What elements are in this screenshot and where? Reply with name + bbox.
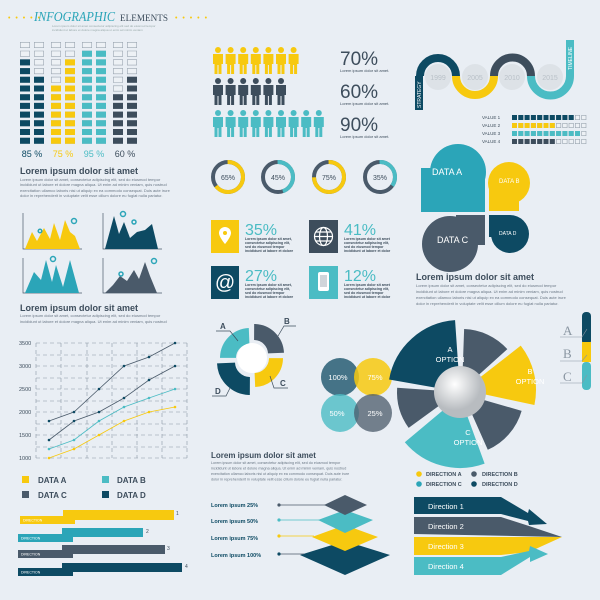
- timeline: 2010: [504, 75, 520, 82]
- heading middle: exercitation ullamco laboris nisi ut aliquip ex ea commodo consequat. Duis aute irure: [211, 472, 349, 476]
- bar grid labels: 75 %: [53, 149, 73, 159]
- icon stats: Lorem ipsum dolor sit amet,: [245, 237, 292, 241]
- ABCD ring chart: [212, 317, 296, 396]
- icon stats: 12%: [344, 268, 376, 285]
- timeline: STRATEGY: [417, 81, 423, 108]
- chart legend: DATA D: [117, 491, 146, 500]
- heading left 2: [20, 303, 167, 324]
- line chart: 2500: [19, 387, 31, 393]
- chart legend: DATA C: [38, 491, 67, 500]
- icon stats: consectetur adipiscing elit,: [245, 241, 290, 245]
- percentage stats 70/60/90: Lorem ipsum dolor sit amet.: [340, 134, 389, 139]
- timeline: TIMELINE: [568, 46, 574, 70]
- percentage stats 70/60/90: Lorem ipsum dolor sit amet.: [340, 68, 389, 73]
- icon stats: consectetur adipiscing elit,: [344, 287, 389, 291]
- data flower: DATA D: [499, 231, 517, 237]
- value bars: VALUE 3: [482, 131, 501, 136]
- direction arrows: Direction 1: [428, 502, 464, 511]
- donut gauges: 45%: [271, 175, 285, 182]
- option pie chart: OPTION: [454, 438, 482, 447]
- icon stats: consectetur adipiscing elit,: [344, 241, 389, 245]
- line chart: 3000: [19, 364, 31, 370]
- value bars: VALUE 2: [482, 123, 501, 128]
- heading right: incididunt ut labore et dolore magna aliqua. Ut enim ad minim veniam, quis nostrud: [416, 289, 563, 294]
- icon stats: sed do eiusmod tempor: [344, 291, 384, 295]
- bar grid labels: 95 %: [84, 149, 104, 159]
- heading left 1: dolor in reprehenderit in voluptate velit esse cillum dolore eu fugiat nulla pariatur.: [20, 193, 163, 198]
- option pie chart: OPTION: [516, 377, 544, 386]
- icon stats: sed do eiusmod tempor: [245, 245, 285, 249]
- direction bars: 4: [185, 564, 188, 570]
- value bars: VALUE 4: [482, 139, 501, 144]
- direction bars: [18, 510, 188, 576]
- donut gauges: [213, 162, 395, 192]
- ABCD ring chart: D: [215, 387, 221, 396]
- icon stats: 41%: [344, 222, 376, 239]
- venn circles: 75%: [367, 373, 383, 382]
- line chart: 1500: [19, 433, 31, 439]
- direction bars: DIRECTION: [23, 518, 43, 522]
- ABCD ring chart: C: [280, 379, 286, 388]
- percentage stats 70/60/90: 70%: [340, 49, 378, 70]
- direction arrows: Direction 4: [428, 562, 464, 571]
- heading middle: Lorem ipsum dolor sit amet: [211, 451, 316, 460]
- icon stats: sed do eiusmod tempor: [344, 245, 384, 249]
- heading middle: [211, 451, 349, 482]
- layered diamonds list: Lorem ipsum 50%: [211, 519, 258, 525]
- heading left 1: Lorem ipsum dolor sit amet: [20, 166, 138, 176]
- heading left 2: Lorem ipsum dolor sit amet: [20, 303, 138, 313]
- icon stats: @: [215, 272, 235, 294]
- heading left 2: Lorem ipsum dolor sit amet, consectetur adipiscing elit, sed do eiusmod tempor: [20, 313, 161, 318]
- direction legend: DIRECTION A: [426, 472, 462, 478]
- heading middle: Lorem ipsum dolor sit amet, consectetur adipiscing elit, sed do eiusmod tempor: [211, 461, 341, 465]
- people pictogram: [213, 47, 324, 137]
- bar grid labels: 60 %: [115, 149, 135, 159]
- icon stats: incididunt ut labore et dolore: [245, 249, 293, 253]
- icon stats: 27%: [245, 268, 277, 285]
- heading right: Lorem ipsum dolor sit amet: [416, 272, 534, 282]
- venn circles: 50%: [329, 409, 345, 418]
- icon stats: 35%: [245, 222, 277, 239]
- icon stats: consectetur adipiscing elit,: [245, 287, 290, 291]
- chart legend: DATA B: [117, 476, 146, 485]
- chart legend: [22, 476, 146, 500]
- chart legend: DATA A: [38, 476, 67, 485]
- direction arrows: [414, 497, 562, 575]
- title: incididunt ut labore et dolore magna aliqua ut enim ad minim veniam: [52, 28, 143, 32]
- bar grid labels: 85 %: [22, 149, 42, 159]
- donut gauges: 65%: [221, 175, 235, 182]
- percentage stats 70/60/90: Lorem ipsum dolor sit amet.: [340, 101, 389, 106]
- icon stats: Lorem ipsum dolor sit amet,: [245, 283, 292, 287]
- option pie chart: C: [465, 428, 471, 437]
- icon stats: incididunt ut labore et dolor: [344, 249, 391, 253]
- line chart: 1000: [19, 456, 31, 462]
- option pie chart: [399, 325, 544, 455]
- percentage stats 70/60/90: 90%: [340, 115, 378, 136]
- direction legend: DIRECTION B: [482, 472, 518, 478]
- donut gauges: 75%: [322, 175, 336, 182]
- ABC vertical indicator: B: [563, 346, 572, 361]
- icon stats: Lorem ipsum dolor sit amet: [344, 283, 391, 287]
- direction bars: DIRECTION: [21, 552, 41, 556]
- area charts: [23, 212, 162, 293]
- heading right: Lorem ipsum dolor sit amet, consectetur adipiscing elit, sed do eiusmod tempor: [416, 283, 557, 288]
- direction legend: DIRECTION C: [426, 482, 462, 488]
- data flower: DATA A: [432, 167, 462, 177]
- bar grid labels: [22, 149, 135, 159]
- direction arrows: Direction 2: [428, 522, 464, 531]
- ABCD ring chart: A: [220, 322, 226, 331]
- heading right: exercitation ullamco laboris nisi ut aliquip ex ea commodo consequat. Duis aute irure: [416, 295, 567, 300]
- ABC vertical indicator: A: [563, 323, 573, 338]
- layered diamonds list: [211, 495, 390, 575]
- timeline: [415, 40, 574, 110]
- title: [8, 10, 209, 32]
- title: • • • • •: [175, 15, 209, 22]
- heading middle: incididunt ut labore et dolore magna aliqua. Ut enim ad minim veniam, quis nostrud: [211, 466, 346, 470]
- icon stats: incididunt ut labore et dolore: [245, 295, 293, 299]
- direction legend: DIRECTION D: [482, 482, 518, 488]
- percentage stats 70/60/90: 60%: [340, 82, 378, 103]
- heading middle: dolor in reprehenderit in voluptate velit esse cillum dolore eu fugiat nulla pariatur.: [211, 478, 342, 482]
- value bars: VALUE 1: [482, 115, 501, 120]
- direction arrows: Direction 3: [428, 542, 464, 551]
- timeline: 1999: [430, 75, 446, 82]
- ABCD ring chart: B: [284, 317, 290, 326]
- icon stats: sed do eiusmod tempor: [245, 291, 285, 295]
- layered diamonds list: Lorem ipsum 75%: [211, 536, 258, 542]
- data flower: DATA C: [437, 235, 469, 245]
- layered diamonds list: Lorem ipsum 25%: [211, 503, 258, 509]
- title: Lorem ipsum dolor sit amet consectetur adipiscing elit sed do eiusmod tempor: [52, 24, 156, 28]
- icon stats: incididunt ut labore et dolor: [344, 295, 391, 299]
- heading left 2: incididunt ut labore et dolore magna aliqua. Ut enim ad minim veniam, quis nostrud: [20, 319, 167, 324]
- line chart: 2000: [19, 410, 31, 416]
- direction bars: 1: [176, 511, 179, 517]
- ABC vertical indicator: C: [563, 369, 572, 384]
- layered diamonds list: Lorem ipsum 100%: [211, 553, 261, 559]
- direction bars: DIRECTION: [21, 570, 41, 574]
- option pie chart: A: [447, 345, 453, 354]
- data flower: DATA B: [499, 179, 519, 185]
- direction legend: [416, 471, 518, 488]
- heading left 1: Lorem ipsum dolor sit amet, consectetur adipiscing elit, sed do eiusmod tempor: [20, 177, 161, 182]
- heading right: dolor in reprehenderit in voluptate velit esse cillum dolore eu fugiat nulla pariatur.: [416, 301, 559, 306]
- bar grid chart: [25, 42, 132, 146]
- title: ELEMENTS: [120, 13, 168, 23]
- heading left 1: exercitation ullamco laboris nisi ut aliquip ex ea commodo consequat. Duis aute irure: [20, 188, 171, 193]
- timeline: 2005: [467, 75, 483, 82]
- percentage stats 70/60/90: [340, 49, 389, 139]
- heading right: [416, 272, 567, 306]
- title: • • • • •: [8, 15, 42, 22]
- line chart: 3500: [19, 341, 31, 347]
- value bars: [482, 115, 588, 144]
- venn circles: [321, 358, 392, 432]
- icon stats: Lorem ipsum dolor sit amet: [344, 237, 391, 241]
- venn circles: 100%: [328, 373, 348, 382]
- title: INFOGRAPHIC: [33, 10, 116, 25]
- timeline: 2015: [542, 75, 558, 82]
- heading left 1: incididunt ut labore et dolore magna aliqua. Ut enim ad minim veniam, quis nostrud: [20, 182, 167, 187]
- ABC vertical indicator: [560, 312, 591, 390]
- donut gauges: 35%: [373, 175, 387, 182]
- venn circles: 25%: [367, 409, 383, 418]
- direction bars: DIRECTION: [21, 536, 41, 540]
- heading left 1: [20, 166, 171, 198]
- option pie chart: OPTION: [436, 355, 464, 364]
- data flower: [421, 144, 530, 272]
- icon stats: [211, 220, 391, 299]
- option pie chart: B: [527, 367, 533, 376]
- line chart: [19, 341, 187, 462]
- direction bars: 2: [146, 529, 149, 535]
- direction bars: 3: [167, 546, 170, 552]
